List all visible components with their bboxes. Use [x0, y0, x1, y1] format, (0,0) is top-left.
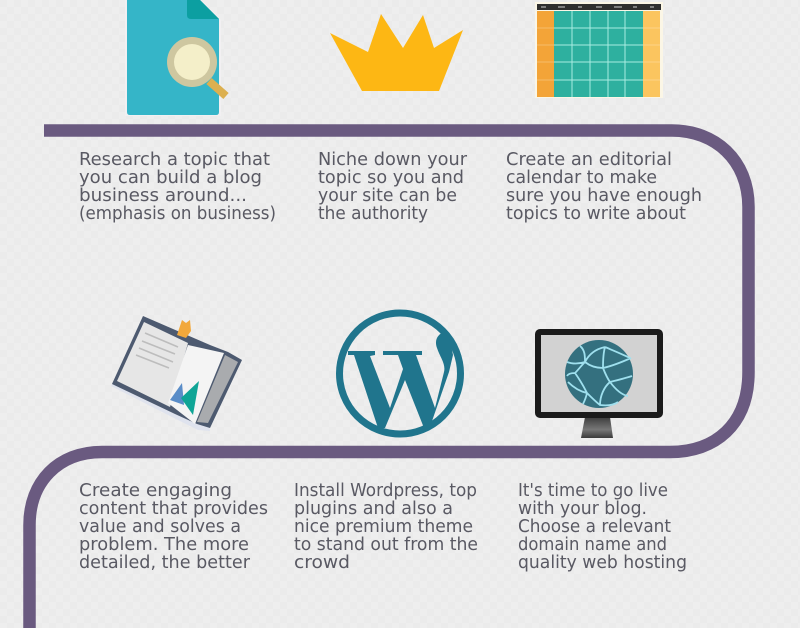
- step text: niche down: your site can be: [318, 186, 457, 206]
- step text: go live: with your blog.: [518, 499, 647, 519]
- step text: engaging content: Create engaging: [79, 481, 232, 501]
- step text: engaging content: problem. The more: [79, 535, 249, 555]
- step text: engaging content: content that provides: [79, 499, 268, 519]
- step text: editorial calendar: calendar to make: [506, 168, 657, 188]
- step text: research a topic: you can build a blog: [79, 168, 262, 188]
- step text: install wordpress: plugins and also a: [294, 499, 453, 519]
- step text: niche down: the authority: [318, 204, 428, 224]
- step text: install wordpress: crowd: [294, 553, 350, 573]
- step text: go live: [518, 481, 687, 573]
- icon: crown: [330, 14, 463, 91]
- icon: monitor with globe: [535, 329, 663, 438]
- icon: open book with chart: [111, 316, 242, 431]
- step text: research a topic: Research a topic that: [79, 150, 270, 170]
- step text: editorial calendar: [506, 150, 702, 224]
- step text: install wordpress: Install Wordpress, top: [294, 481, 477, 501]
- step text: go live: Choose a relevant: [518, 517, 671, 537]
- step text: research a topic: (emphasis on business): [79, 204, 276, 224]
- step text: editorial calendar: sure you have enough: [506, 186, 702, 206]
- step text: editorial calendar: Create an editorial: [506, 150, 672, 170]
- icon: editorial calendar: [535, 2, 663, 98]
- step text: install wordpress: [294, 481, 478, 573]
- step text: research a topic: business around...: [79, 186, 247, 206]
- step text: go live: It's time to go live: [518, 481, 668, 501]
- step text: go live: domain name and: [518, 535, 667, 555]
- step text: niche down: topic so you and: [318, 168, 464, 188]
- step text: niche down: [318, 150, 468, 224]
- icon: wordpress logo: [340, 313, 460, 434]
- step text: editorial calendar: topics to write about: [506, 204, 686, 224]
- step text: install wordpress: to stand out from the: [294, 535, 478, 555]
- step text: go live: quality web hosting: [518, 553, 687, 573]
- step text: engaging content: [79, 481, 268, 573]
- step text: niche down: Niche down your: [318, 150, 468, 170]
- icon: document with magnifier: [125, 0, 226, 116]
- step text: engaging content: value and solves a: [79, 517, 241, 537]
- timeline path: [30, 130, 748, 628]
- step text: engaging content: detailed, the better: [79, 553, 251, 573]
- step text: research a topic: [79, 150, 276, 224]
- step text: install wordpress: nice premium theme: [294, 517, 473, 537]
